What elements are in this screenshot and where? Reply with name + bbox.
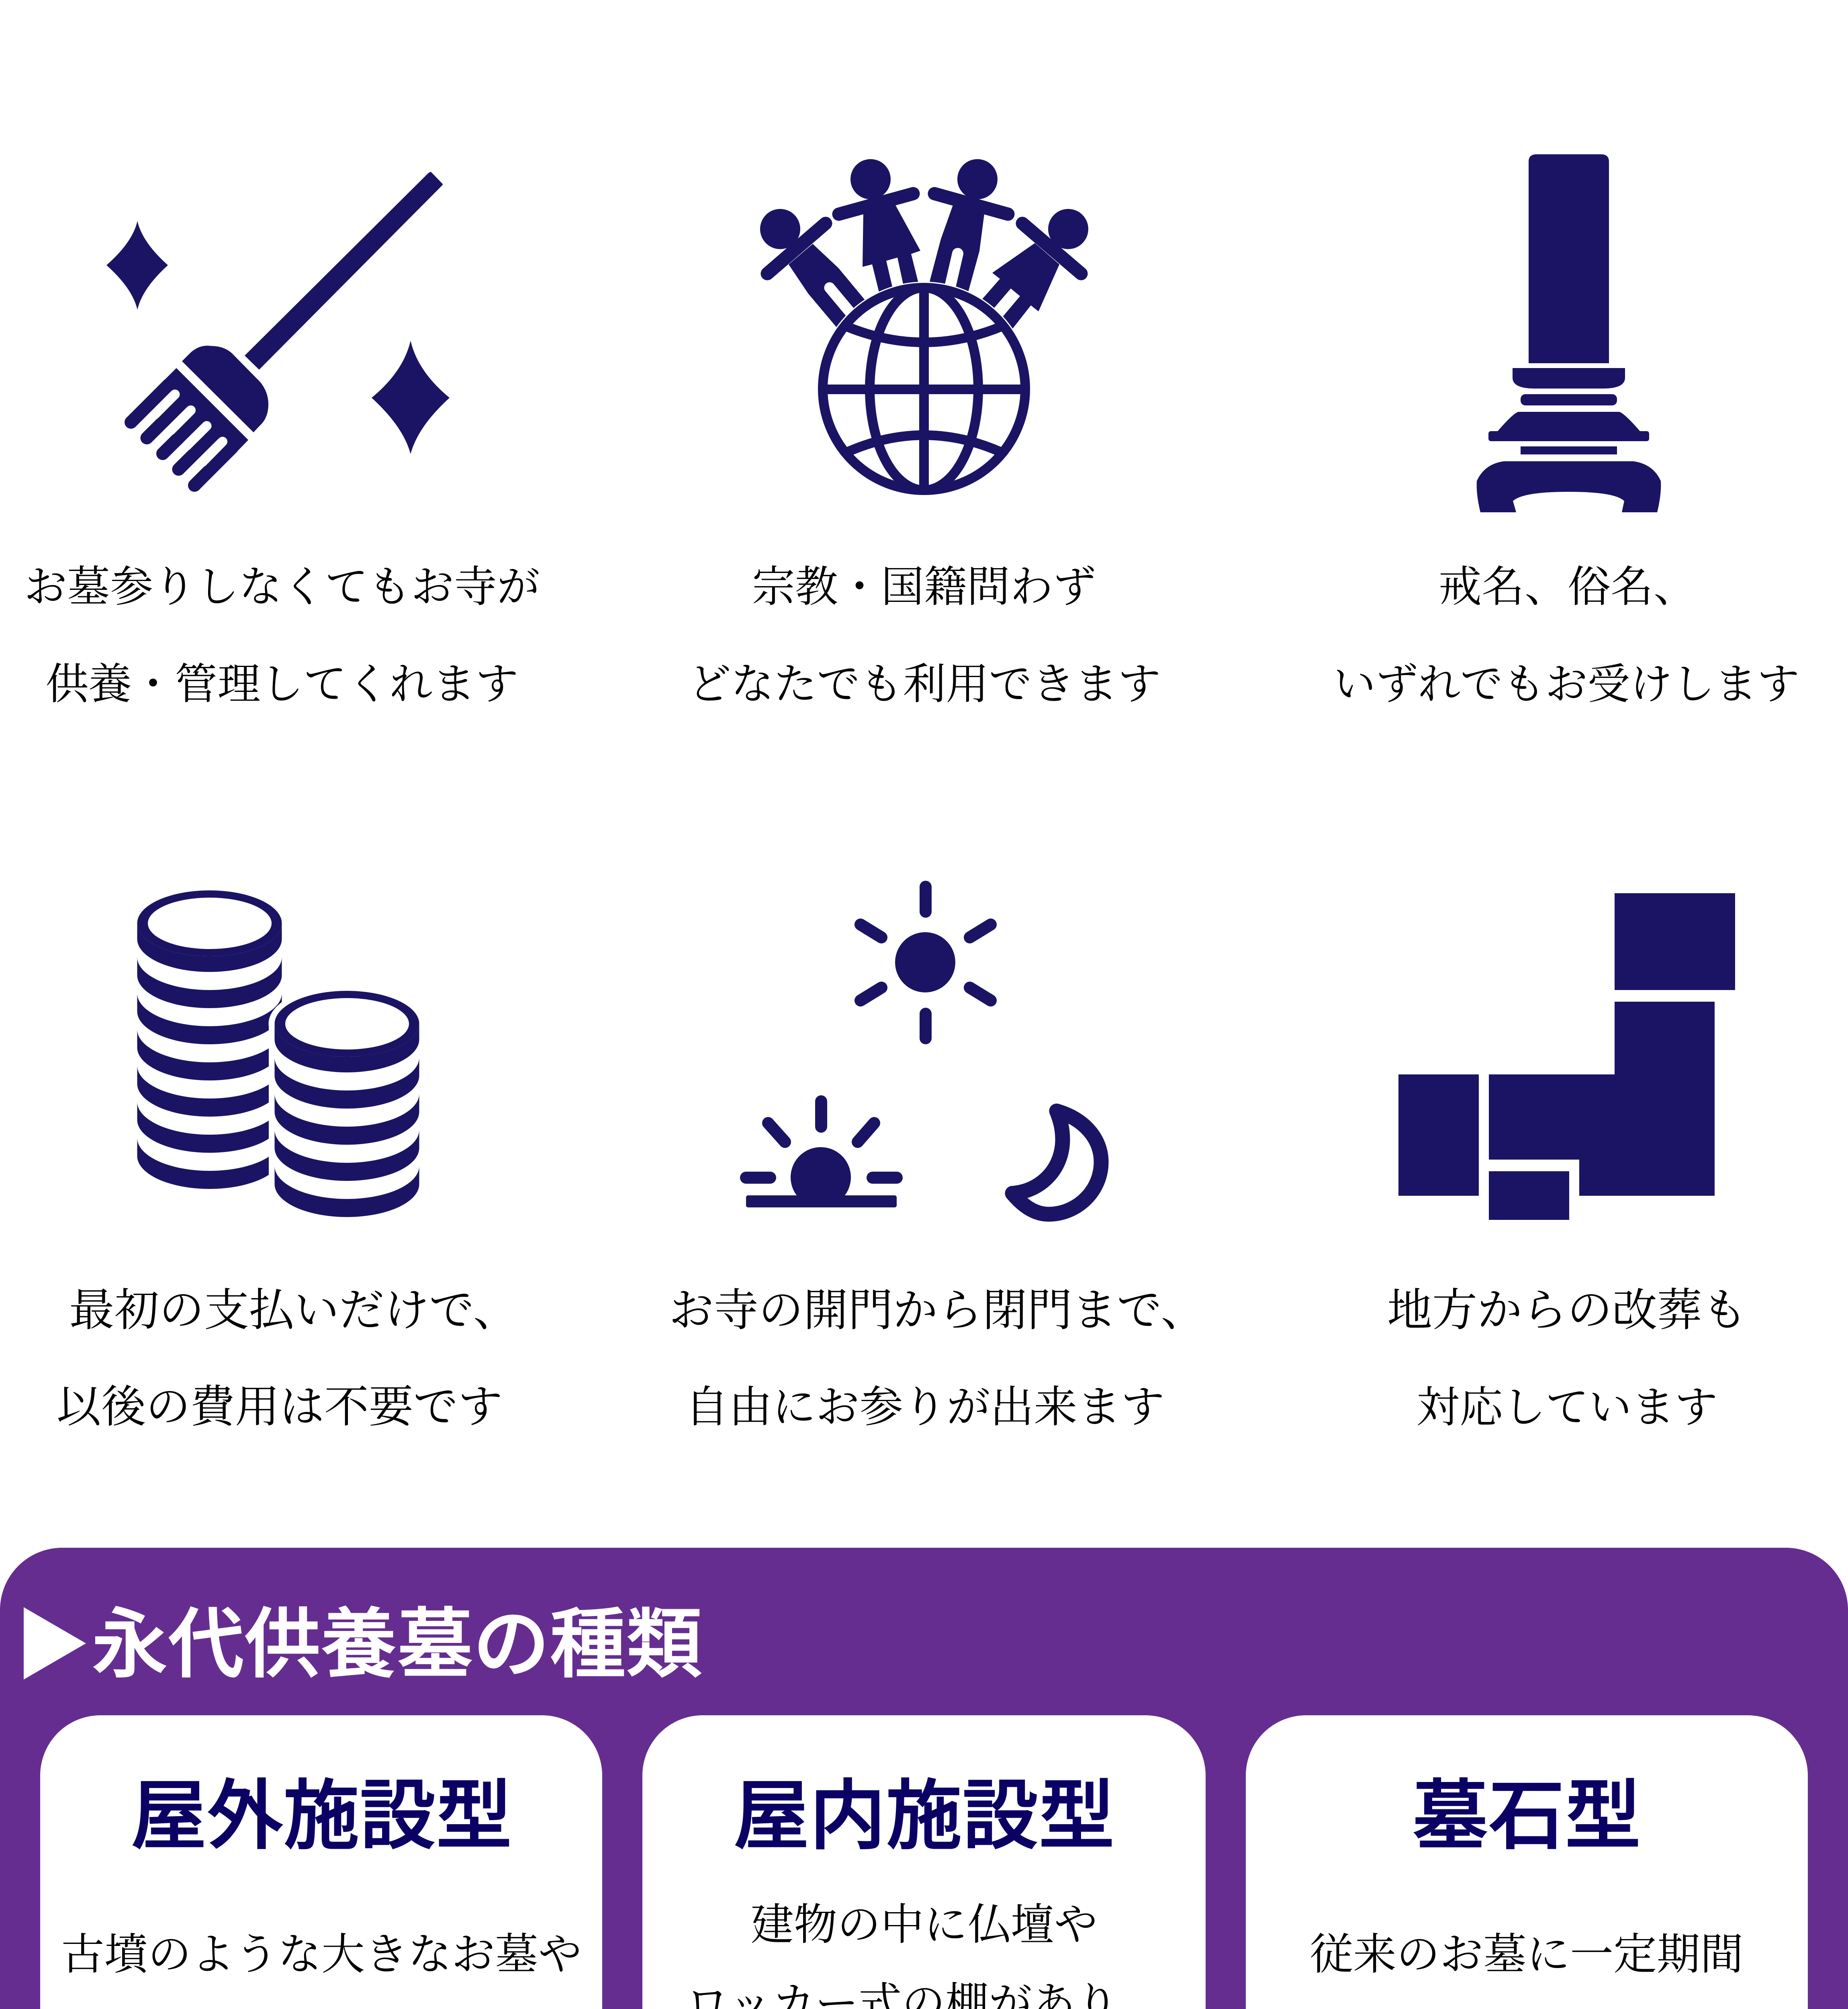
card description: 古墳のような大きなお墓や bbox=[61, 1931, 582, 1979]
feature: visit any time bbox=[669, 887, 1206, 1432]
card title: 屋内施設型 bbox=[733, 1774, 1115, 1859]
icon: block map of Japan bbox=[1398, 893, 1735, 1220]
caption: opening hours bbox=[669, 1286, 1206, 1432]
feature: no further cost bbox=[57, 890, 518, 1432]
caption: names: いずれでもお受けします bbox=[1333, 661, 1799, 708]
feature: reburial from anywhere bbox=[1387, 893, 1747, 1432]
icon: coin stacks bbox=[137, 890, 425, 1217]
caption: opening hours: お寺の開門から閉門まで、 bbox=[669, 1286, 1206, 1336]
caption: religion bbox=[688, 564, 1161, 708]
feature: any religion or nationality bbox=[688, 159, 1161, 708]
caption: cleaning bbox=[24, 564, 540, 708]
caption: religion: どなたでも利用できます bbox=[688, 661, 1161, 708]
card: indoor facility bbox=[642, 1715, 1206, 2009]
feature: cleaning by temple bbox=[24, 172, 540, 708]
caption: reburial: 対応しています bbox=[1417, 1384, 1718, 1432]
feature: any posthumous name bbox=[1333, 154, 1799, 708]
icon: sun, sunrise and moon bbox=[746, 887, 1101, 1214]
caption: cost bbox=[57, 1286, 518, 1432]
caption: cost: 最初の支払いだけで、 bbox=[69, 1286, 518, 1336]
caption: reburial bbox=[1387, 1286, 1747, 1432]
section heading with arrow: 永代供養墓の種類 bbox=[92, 1602, 702, 1687]
caption: cost: 以後の費用は不要です bbox=[57, 1383, 503, 1432]
caption: cleaning: 供養・管理してくれます bbox=[45, 661, 519, 708]
icon: gravestone bbox=[1477, 154, 1661, 512]
icon: broom with sparkles bbox=[106, 172, 450, 485]
card: gravestone type bbox=[1246, 1715, 1808, 2009]
caption: reburial: 地方からの改葬も bbox=[1387, 1286, 1747, 1336]
panel: types of perpetual memorial graves bbox=[0, 1548, 1848, 2009]
caption: names: 戒名、俗名、 bbox=[1439, 564, 1697, 611]
caption: opening hours: 自由にお参りが出来ます bbox=[685, 1383, 1165, 1432]
caption: religion: 宗教・国籍問わず bbox=[752, 564, 1096, 611]
card description bbox=[643, 1901, 1205, 2009]
card title: 屋外施設型 bbox=[131, 1774, 512, 1859]
card title: 墓石型 bbox=[1412, 1774, 1641, 1859]
card description: 建物の中に仏壇や bbox=[750, 1901, 1098, 1949]
card description: 従来のお墓に一定期間 bbox=[1310, 1931, 1744, 1979]
icon: people on globe bbox=[760, 159, 1088, 496]
caption: names bbox=[1333, 564, 1799, 708]
caption: cleaning: お墓参りしなくてもお寺が bbox=[24, 564, 540, 611]
card: outdoor facility bbox=[40, 1715, 602, 2009]
